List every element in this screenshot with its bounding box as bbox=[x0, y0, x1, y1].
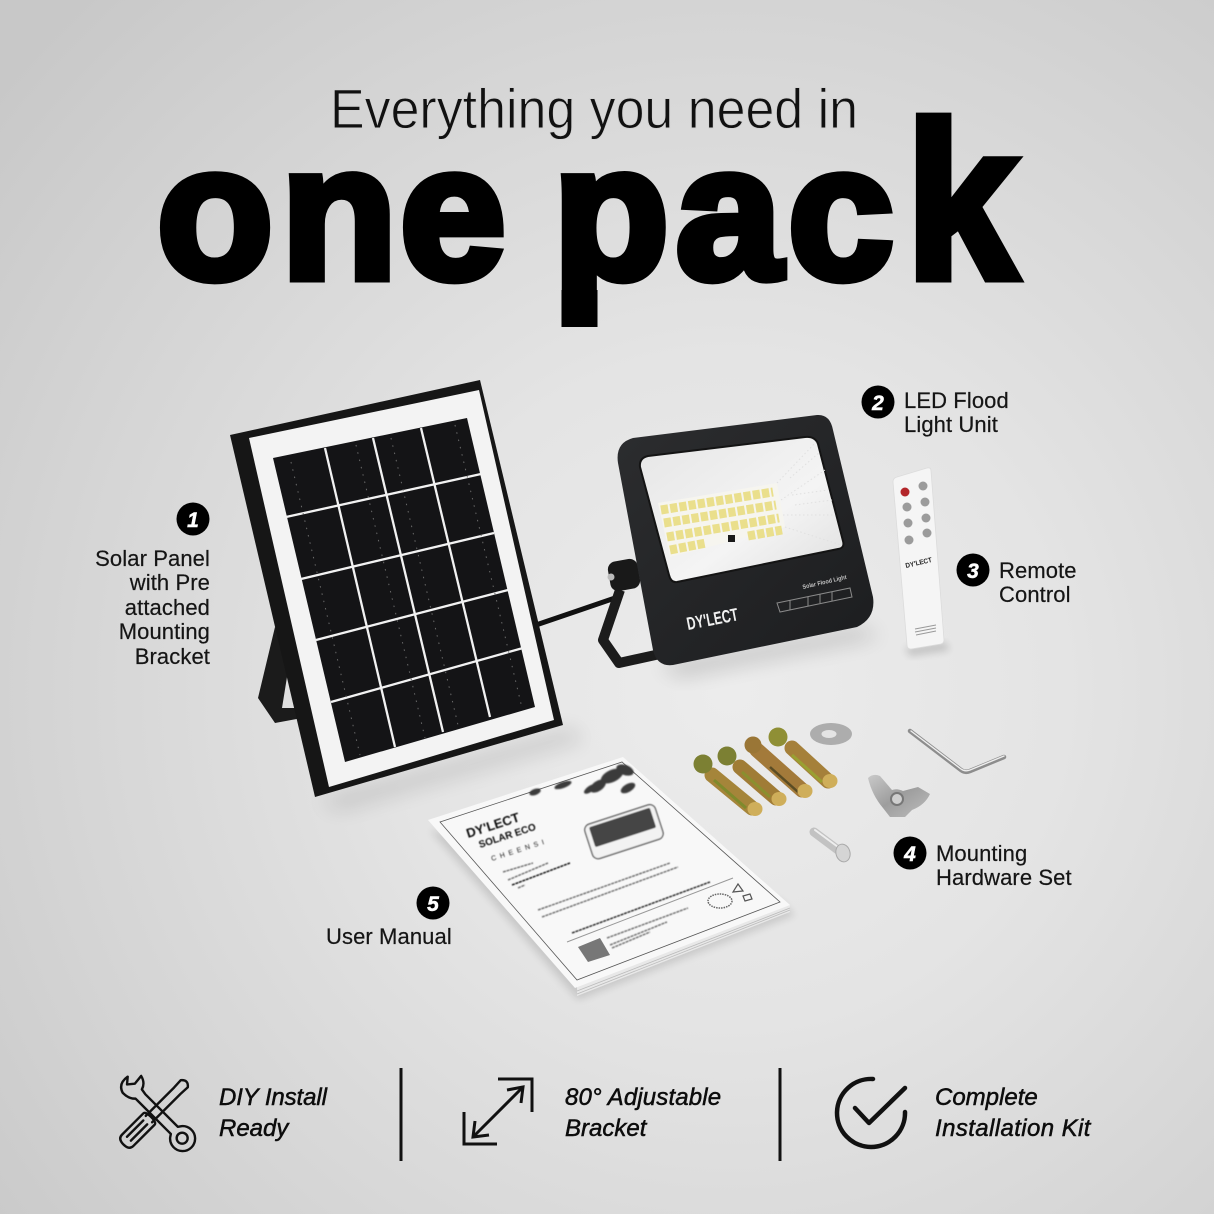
badge 2 bbox=[862, 386, 894, 418]
title line: one pack: k bbox=[906, 77, 1018, 325]
label: LED Flood Light Unit: LED Flood bbox=[904, 388, 1009, 413]
label: Mounting Hardware Set: Hardware Set bbox=[936, 865, 1072, 890]
title line: Everything you need in: Everything you need in bbox=[330, 77, 858, 140]
manual seal bbox=[708, 894, 732, 908]
manual heading bbox=[464, 810, 549, 863]
text: 80° Adjustable Bracket: Bracket bbox=[565, 1115, 648, 1142]
badge 4 bbox=[894, 836, 926, 870]
manual heading: SOLAR ECO bbox=[478, 822, 538, 851]
callout 3: Remote Control bbox=[956, 554, 1077, 607]
manual recycling marks bbox=[733, 884, 752, 901]
expansion bolts bbox=[694, 728, 838, 816]
text: Complete Installation Kit: Complete bbox=[935, 1084, 1038, 1111]
leaf artwork bbox=[528, 762, 637, 797]
badge 4: 4 bbox=[903, 843, 916, 866]
divider bbox=[400, 1068, 402, 1161]
title line: one pack: one pac bbox=[157, 107, 894, 319]
label: Remote Control: Remote bbox=[999, 558, 1077, 583]
icon: wrench and screwdriver bbox=[115, 1069, 202, 1156]
bolt 1 bbox=[694, 754, 762, 816]
remote brand: DY'LECT bbox=[905, 557, 933, 570]
feature: 80° Adjustable Bracket bbox=[464, 1079, 721, 1144]
wing nut bbox=[868, 775, 930, 817]
badge 5: 5 bbox=[427, 893, 439, 916]
screw bbox=[814, 830, 852, 864]
text: DIY Install Ready: DIY Install bbox=[219, 1084, 328, 1111]
panel shadow bbox=[320, 728, 585, 810]
glass reflector mesh bbox=[777, 442, 841, 545]
product: LED flood light bbox=[603, 415, 880, 676]
label: Mounting Hardware Set: Mounting bbox=[936, 841, 1027, 866]
badge 1: 1 bbox=[187, 509, 199, 532]
feature: Complete Installation Kit bbox=[837, 1079, 1092, 1147]
spec icons strip bbox=[777, 588, 852, 612]
product: mounting hardware set bbox=[694, 723, 1004, 864]
flood light bracket bbox=[603, 590, 660, 663]
product: user manual bbox=[428, 757, 795, 1000]
label: LED Flood Light Unit: Light Unit bbox=[904, 412, 998, 437]
badge 2: 2 bbox=[871, 392, 884, 415]
divider bbox=[778, 1068, 782, 1161]
flood light knob bbox=[607, 558, 641, 592]
badge 3: 3 bbox=[967, 560, 979, 583]
manual heading: CHEENSI bbox=[490, 838, 549, 863]
washer bbox=[810, 723, 852, 745]
remote buttons bbox=[900, 482, 932, 544]
manual shadow bbox=[430, 830, 795, 1000]
remote body bbox=[893, 468, 944, 649]
feature: DIY Install Ready bbox=[115, 1069, 328, 1156]
manual heading: DY'LECT bbox=[464, 810, 521, 841]
icon: adjustable arrows bbox=[464, 1079, 532, 1144]
label: Remote Control: Control bbox=[999, 582, 1071, 607]
panel stand bbox=[258, 627, 302, 723]
brand text DY'LECT: DY'LECT bbox=[685, 604, 740, 634]
LED module bbox=[658, 483, 785, 557]
manual text lines bbox=[503, 863, 710, 948]
manual cover border bbox=[440, 762, 780, 980]
callout 1: Solar Panel bbox=[95, 502, 210, 669]
panel white border bbox=[249, 390, 554, 787]
text: 80° Adjustable Bracket: 80° Adjustable bbox=[565, 1084, 721, 1111]
icon: check mark in open circle bbox=[837, 1079, 905, 1147]
label: User Manual: User Manual bbox=[326, 924, 452, 949]
label: Solar Panel with Pre attached Mounting Bracket: with Pre bbox=[129, 570, 210, 595]
manual product image bbox=[583, 803, 665, 860]
label: Solar Panel with Pre attached Mounting Bracket: attached bbox=[125, 595, 210, 620]
manual cover bbox=[428, 757, 790, 988]
bolt 3 bbox=[744, 736, 812, 798]
flood light glass bbox=[640, 437, 843, 582]
label: Solar Panel with Pre attached Mounting Bracket: Mounting bbox=[119, 619, 210, 644]
small label Solar Flood Light: Solar Flood Light bbox=[802, 575, 847, 591]
flood light housing bbox=[618, 415, 873, 665]
solar cells bbox=[273, 418, 535, 762]
product: solar panel with bracket bbox=[230, 380, 585, 810]
text: DIY Install Ready: Ready bbox=[219, 1115, 290, 1142]
callout 2: LED Flood Light Unit bbox=[862, 386, 1009, 437]
product: remote control bbox=[893, 468, 950, 656]
allen key bbox=[910, 731, 1004, 772]
callout 4: Mounting Hardware Set bbox=[894, 836, 1072, 890]
bolt 2 bbox=[718, 746, 786, 806]
badge 1 bbox=[176, 502, 210, 536]
text: Complete Installation Kit: Installation Kit bbox=[935, 1115, 1092, 1142]
callout 5: User Manual bbox=[326, 886, 452, 949]
remote shadow bbox=[905, 642, 950, 656]
manual QR code bbox=[578, 938, 610, 962]
bolt 4 bbox=[768, 728, 838, 788]
title bbox=[157, 77, 1018, 327]
label: Solar Panel with Pre attached Mounting Bracket: Bracket bbox=[135, 644, 210, 669]
flood light shadow bbox=[660, 628, 880, 676]
remote fine print bbox=[915, 625, 936, 635]
label: Solar Panel with Pre attached Mounting Bracket: Solar Panel bbox=[95, 546, 210, 571]
manual stack bbox=[428, 757, 790, 996]
panel frame bbox=[230, 380, 563, 797]
cable between solar panel and flood light bbox=[536, 598, 615, 625]
